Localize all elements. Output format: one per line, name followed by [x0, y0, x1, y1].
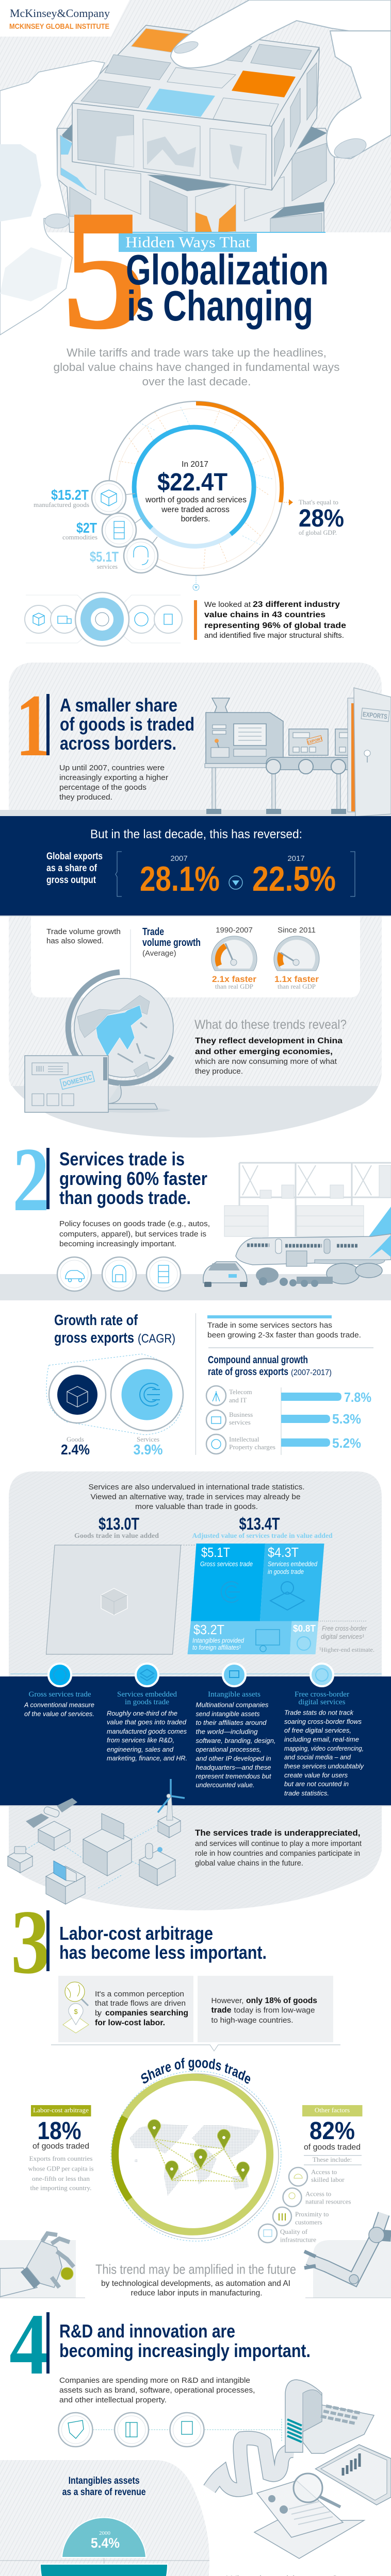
manufactured goods: manufactured goods: [34, 501, 89, 509]
body: section 4: and other intellectual property.: [59, 2396, 167, 2404]
goods circle: [49, 1366, 106, 1458]
heading 1: across borders.: [60, 733, 176, 754]
text: what do these trends reveal: and other emerging economies,: [195, 1047, 333, 1056]
heading: growth rate: Growth rate of: [54, 1312, 138, 1329]
chart: growth rate of gross exports: [46, 1312, 183, 1458]
body: section 2: becoming increasingly important.: [59, 1240, 176, 1248]
chart: sector CAGR bars: [206, 1315, 373, 1455]
2007 figure: 28.1%: [140, 859, 220, 899]
heading: trade volume growth: [142, 926, 201, 958]
section 3 heading: Labor-cost arbitrage: [59, 1923, 213, 1944]
text: what do these trends reveal: they produce.: [195, 1067, 243, 1076]
body: section 4: Companies are spending more on R&D and intangible: [59, 2376, 250, 2385]
location pins: [148, 2120, 250, 2181]
factor: skilled labor: skilled labor: [311, 2176, 345, 2183]
callout: only 18%: [198, 1976, 333, 2042]
half circle 2000: 5.4%: [91, 2535, 120, 2551]
intro callout: 23 different industry: [253, 600, 340, 609]
column: services embedded: Roughly one-third of the: [107, 1709, 177, 1717]
text: services underappreciated: The services trade is underappreciated,: [195, 1828, 360, 1838]
segment: intangibles: $3.2T: [193, 1622, 224, 1637]
body 1: percentage of the goods: [59, 783, 146, 792]
section 4 heading: becoming increasingly important.: [59, 2340, 311, 2361]
services block: digital services¹: [321, 1633, 365, 1640]
heading 1: [60, 694, 194, 754]
section 2 heading: growing 60% faster: [59, 1168, 207, 1189]
cube: truck: [46, 1861, 85, 1904]
section 4 heading: [9, 2296, 311, 2393]
heading: growth rate: [54, 1312, 175, 1346]
section 2 heading: than goods trade.: [59, 1187, 191, 1208]
callout: only 18%: today is from low-wage: [234, 2006, 315, 2014]
section 4 heading: 4: [9, 2296, 48, 2393]
stat: other factors 82%: of goods traded: [304, 2143, 361, 2152]
segment: services embedded: Services embedded: [268, 1560, 318, 1568]
label: global exports: as a share of: [46, 863, 97, 874]
factory machine and conveyor: [205, 698, 355, 814]
segment: gross services trade: [200, 1545, 253, 1602]
title headline: is Changing: [127, 282, 313, 330]
callout: only 18%: to high-wage countries.: [211, 2016, 293, 2025]
title headline: [126, 246, 329, 330]
chart: share of goods trade ring: [110, 2058, 291, 2241]
text: what do these trends reveal: What do these trends reveal?: [194, 1018, 347, 1032]
column: services embedded: engineering, sales and: [107, 1745, 174, 1753]
column: free digital services: of free digital services,: [284, 1726, 351, 1734]
cube: wind turbine: [158, 1779, 185, 1838]
text: services underappreciated: [195, 1828, 362, 1868]
chart: sector CAGR bars: been growing 2-3x faster than goods trade.: [207, 1331, 361, 1340]
stat: other factors 82%: These include:: [313, 2156, 352, 2163]
title numeral 5: 5: [62, 174, 147, 365]
column: gross services trade: A conventional measure: [24, 1701, 94, 1708]
gauge since 2011: than real GDP: [278, 983, 316, 990]
2007 figure: 2007: [170, 854, 188, 863]
column: free digital services: trade statistics.: [284, 1789, 329, 1797]
illustration: payment terminal and receipt: [209, 2380, 374, 2490]
stat: labor-cost arbitrage 18%: the importing country.: [30, 2184, 92, 2192]
stat: labor-cost arbitrage 18%: Exports from countries: [29, 2155, 93, 2162]
band: exports share reversal: But in the last decade, this has reversed:: [90, 827, 302, 841]
column: gross services trade: Gross services trade: [29, 1690, 91, 1699]
factor: skilled labor: [289, 2167, 345, 2186]
logo: McKinsey & Company: McKinsey&Company: [10, 7, 110, 20]
export door: [348, 688, 391, 817]
callout: only 18%: trade: [211, 2006, 232, 2014]
column: services embedded: in goods trade: [125, 1698, 169, 1706]
panel: services undervalued: [9, 1471, 382, 1910]
gauge 1990-2007: 2.1x faster: [212, 974, 256, 984]
2017 figure: 2017: [287, 854, 305, 863]
ground strip 2: [0, 1274, 391, 1300]
intro callout: value chains in 43 countries: [204, 611, 325, 619]
panel: trade volume growth: has also slowed.: [46, 937, 104, 945]
car: [203, 1262, 247, 1287]
text: services underappreciated: role in how countries and companies participate in: [195, 1849, 360, 1858]
column: intangible assets: to their affiliates around: [196, 1719, 267, 1726]
heading: compound annual growth: rate of gross exports: [208, 1366, 288, 1378]
column: intangible assets: Multinational companies: [196, 1701, 269, 1708]
callout: common perception: It's a common perception: [95, 1990, 184, 1998]
gauge since 2011: [274, 926, 319, 990]
bar: telecom and IT: and IT: [229, 1396, 247, 1404]
gauge since 2011: 1.1x faster: [274, 974, 319, 984]
centre figure: [145, 460, 247, 523]
section 3 heading: has become less important.: [59, 1942, 267, 1963]
text: what do these trends reveal: They reflect development in China: [195, 1037, 343, 1045]
factor: proximity: customers: [295, 2218, 322, 2226]
panel: trade volume growth: [0, 916, 391, 997]
panel: intangibles share of revenue: [0, 2460, 209, 2576]
factor: infrastructure: Quality of: [280, 2228, 308, 2235]
robotic arm right: [304, 2214, 391, 2298]
text: what do these trends reveal: [194, 1018, 347, 1076]
top cube layer: [72, 25, 319, 190]
callout: common perception: that trade flows are driven: [95, 1999, 186, 2008]
cube: documents: [139, 1843, 175, 1886]
factor: proximity: [273, 2207, 329, 2226]
callout: common perception: [58, 1976, 193, 2042]
ground strip: [0, 810, 391, 816]
heading: growth rate: (CAGR): [138, 1332, 175, 1346]
column: free digital services: digital services: [298, 1698, 346, 1706]
callout: only 18%: only 18% of goods: [246, 1996, 317, 2005]
services circle: 3.9%: [133, 1442, 163, 1458]
icon: down arrow: [229, 876, 242, 889]
section 3 heading: 3: [11, 1891, 50, 1993]
intro callout: and identified five major structural shifts.: [204, 631, 344, 640]
intro callout: We looked at: [204, 600, 251, 609]
numeral 1: 1: [15, 676, 51, 775]
logo: McKinsey & Company: MCKINSEY GLOBAL INSTITUTE: [9, 22, 109, 31]
heading: compound annual growth: [208, 1354, 332, 1378]
body: section 2: computers, apparel), but services trade is: [59, 1230, 206, 1239]
body: section 2: [59, 1219, 210, 1248]
segment: gross services trade: Gross services trade: [200, 1560, 253, 1568]
half circle 2017: [40, 2564, 168, 2576]
column: services embedded: marketing, finance, and HR.: [107, 1754, 187, 1762]
title: [62, 174, 329, 365]
centre figure: were traded across: [161, 505, 230, 514]
section 4 heading: R&D and innovation are: [59, 2320, 235, 2342]
services block: $13.4T: [239, 1514, 280, 1533]
lower cube layers: [57, 121, 334, 232]
commodities: commodities: [62, 534, 97, 541]
body 1: Up until 2007, countries were: [59, 764, 165, 772]
factor: natural resources: [283, 2188, 351, 2207]
column: free digital services: Free cross-border: [295, 1690, 349, 1699]
2017 figure: 22.5%: [252, 859, 336, 899]
heading 1: A smaller share: [60, 694, 177, 716]
panel: shift 1: [0, 663, 391, 1138]
heading: growth rate: gross exports: [54, 1330, 134, 1346]
factor: natural resources: natural resources: [305, 2198, 351, 2205]
text: services underappreciated: and services will continue to play a more important: [195, 1839, 362, 1848]
column: free digital services: these services undoubtably: [284, 1762, 364, 1770]
ring: other factors 82%: [125, 2077, 270, 2232]
text: what do these trends reveal: which are now consuming more of what: [194, 1057, 337, 1066]
callout: common perception: for low-cost labor.: [95, 2019, 165, 2027]
stat: labor-cost arbitrage 18%: 18%: [37, 2117, 82, 2145]
segment: intangibles: Intangibles provided: [192, 1636, 245, 1645]
column: services embedded: Services embedded: [117, 1690, 177, 1699]
services: [90, 537, 158, 573]
text: trend amplified: [0, 2262, 391, 2298]
bar: intellectual property charges: Property charges: [229, 1443, 275, 1451]
value chain icons row: [25, 592, 182, 646]
label: global exports: Global exports: [46, 851, 103, 862]
stat: other factors 82%: 82%: [309, 2117, 355, 2145]
section 2 heading: 2: [12, 1128, 50, 1230]
goods block: [46, 1514, 181, 1654]
right hand fingers: [171, 0, 391, 162]
icon: location dollar: $: [74, 2008, 78, 2015]
services: services: [97, 563, 118, 570]
warehouse shelves: [224, 1163, 391, 1236]
column: free digital services: but are not counted in: [284, 1780, 349, 1788]
column: intangible assets: software, branding, design,: [196, 1737, 275, 1744]
stat: labor-cost arbitrage 18%: of goods traded: [32, 2142, 89, 2151]
half circle 2000: 2000: [99, 2530, 110, 2536]
column: intangible assets: undercounted value.: [196, 1781, 255, 1789]
trade value ring chart: [34, 401, 344, 590]
intro text: global value chains have changed in fundamental ways: [54, 361, 339, 374]
segment: free digital: $0.8T: [293, 1623, 316, 1634]
stat: other factors 82%: [258, 2105, 362, 2243]
intro text: [54, 346, 339, 388]
illustration: reports and magnifier: [254, 2445, 391, 2558]
column: intangible assets: headquarters—and these: [196, 1764, 271, 1771]
column: free digital services: [284, 1664, 364, 1797]
services circle: [111, 1359, 183, 1458]
column: services embedded: [107, 1664, 187, 1762]
segment: intangibles: to foreign affiliates¹: [192, 1643, 241, 1651]
title headline: Globalization: [126, 246, 329, 294]
icon: location dollar: [63, 2004, 89, 2033]
gauge since 2011: Since 2011: [278, 926, 316, 935]
intro callout: [194, 600, 346, 640]
chart: sector CAGR bars: Trade in some services sectors has: [207, 1321, 332, 1330]
column: intangible assets: send intangible assets: [196, 1710, 260, 1718]
column: free digital services: and social media – and: [284, 1753, 351, 1761]
factor: skilled labor: Access to: [311, 2168, 337, 2176]
segment: services embedded: [268, 1545, 318, 1610]
stat: other factors 82%: Other factors: [315, 2106, 350, 2114]
bar: intellectual property charges: Intellectual: [229, 1435, 259, 1443]
icon: globe and magnifier: [65, 1982, 88, 2006]
globe and domestic box: [25, 972, 173, 1113]
bar: intellectual property charges: 5.2%: [332, 1435, 361, 1451]
box: domestic: [25, 1056, 108, 1112]
body 1: they produced.: [59, 793, 112, 802]
column: intangible assets: [196, 1664, 275, 1789]
orange arc 28% of GDP: [196, 403, 282, 502]
centre figure: $22.4T: [157, 469, 227, 496]
bar: business services: services: [229, 1418, 251, 1426]
section 2 heading: [12, 1128, 207, 1230]
services circle: Services: [137, 1435, 159, 1443]
icon: down arrow dot: [193, 584, 199, 590]
band: services definitions: [0, 1664, 391, 1806]
column: gross services trade: [24, 1664, 94, 1718]
half circle 2000: [62, 2517, 146, 2557]
column: free digital services: create value for users: [284, 1771, 348, 1779]
column: services embedded: manufactured goods comes: [107, 1727, 187, 1735]
stat: labor-cost arbitrage 18%: one-fifth or less than: [32, 2175, 90, 2182]
centre figure: In 2017: [182, 460, 208, 469]
arrow to GDP share: [282, 499, 293, 505]
services block: Adjusted value of services trade in value added: [192, 1532, 333, 1540]
ring: labor-cost arbitrage 18%: [115, 2117, 129, 2199]
cube: briefcase: [83, 1814, 132, 1876]
label: global exports: [46, 851, 103, 886]
heading: compound annual growth: (2007-2017): [291, 1368, 332, 1377]
stat: labor-cost arbitrage 18%: whose GDP per capita is: [28, 2165, 94, 2172]
icons: goods examples: [57, 1257, 181, 1291]
cube: satellite: [26, 1798, 77, 1851]
factor: proximity: Proximity to: [295, 2210, 329, 2218]
column: free digital services: mapping, video conferencing,: [284, 1744, 364, 1752]
gauge 1990-2007: 1990-2007: [216, 926, 253, 935]
intro callout: representing 96% of global trade: [204, 621, 346, 630]
text: trend amplified: by technological developments, as automation and AI: [101, 2279, 290, 2288]
band: exports share reversal: [0, 816, 391, 916]
bar: telecom and IT: Telecom: [229, 1388, 252, 1396]
goods block: $13.0T: [99, 1514, 139, 1533]
goods circle: 2.4%: [61, 1442, 90, 1458]
intro text: over the last decade.: [142, 375, 251, 388]
goods block: Goods trade in value added: [74, 1532, 159, 1540]
segment: gross services trade: $5.1T: [201, 1545, 230, 1560]
column: gross services trade: of the value of services.: [24, 1710, 94, 1718]
panel: intangibles share of revenue: Intangibles assets: [69, 2476, 140, 2486]
intro text: While tariffs and trade wars take up the headlines,: [67, 346, 327, 359]
GDP share callout: That's equal to: [299, 499, 338, 506]
panel: services undervalued: more valuable than trade in goods.: [135, 1502, 258, 1511]
hero illustration: hands turning a world-map cube: [0, 0, 391, 335]
column: intangible assets: operational processes,: [196, 1745, 261, 1753]
robotic hand left: [0, 2233, 76, 2298]
bar: intellectual property charges: [206, 1434, 361, 1454]
goods circle: Goods: [67, 1435, 84, 1443]
segment: intangibles: [192, 1622, 280, 1652]
body: section 4: [59, 2376, 255, 2404]
manufactured goods: [34, 481, 135, 515]
stat: labor-cost arbitrage 18%: [28, 2105, 94, 2192]
logo: McKinsey & Company: [9, 7, 110, 31]
callout: common perception: companies searching: [105, 2009, 188, 2018]
column: services embedded: value that goes into traded: [107, 1718, 187, 1726]
gauge 1990-2007: than real GDP: [215, 983, 253, 990]
bar: business services: [206, 1410, 361, 1430]
text: trend amplified: reduce labor inputs in manufacturing.: [131, 2289, 262, 2298]
factor: infrastructure: infrastructure: [280, 2236, 316, 2243]
bar: telecom and IT: 7.8%: [344, 1389, 371, 1405]
stat: labor-cost arbitrage 18%: Labor-cost arbitrage: [33, 2106, 89, 2114]
services block: ¹Higher-end estimate.: [319, 1646, 374, 1653]
segment: free digital: [293, 1623, 316, 1650]
heading 1: of goods is traded: [60, 714, 194, 735]
GDP share callout: [299, 499, 344, 536]
icons: intangibles: [59, 2413, 282, 2447]
trade routes: [154, 2139, 243, 2181]
text: services underappreciated: global value chains in the future.: [195, 1859, 303, 1868]
heading: compound annual growth: Compound annual growth: [208, 1354, 308, 1366]
body: section 2: Policy focuses on goods trade (e.g., autos,: [59, 1219, 210, 1228]
commodities: $2T: [76, 520, 97, 536]
panel: services undervalued: Services are also undervalued in international trade statistics.: [89, 1483, 304, 1492]
callout: only 18%: However,: [211, 1996, 243, 2005]
bar: telecom and IT: [206, 1386, 371, 1405]
label: global exports: gross output: [46, 875, 96, 886]
factor: natural resources: Access to: [305, 2190, 331, 2198]
body: section 4: assets such as brand, software, operational processes,: [59, 2386, 255, 2395]
section 3 heading: [11, 1891, 267, 1993]
panel: trade volume growth: Trade volume growth: [46, 927, 121, 936]
heading: trade volume growth: volume growth: [142, 937, 201, 948]
centre figure: borders.: [181, 515, 210, 523]
column: services embedded: from services like R&D,: [107, 1736, 174, 1744]
segment: services embedded: $4.3T: [268, 1545, 299, 1560]
text: trend amplified: This trend may be amplified in the future: [95, 2262, 296, 2277]
cube: small left: [8, 1846, 32, 1873]
column: intangible assets: Intangible assets: [208, 1690, 260, 1699]
services block: Free cross-border: [322, 1624, 367, 1632]
panel: intangibles share of revenue: as a share of revenue: [62, 2487, 146, 2498]
GDP share callout: 28%: [299, 505, 344, 532]
bar: business services: 5.3%: [332, 1411, 361, 1427]
services block: [188, 1514, 374, 1654]
column: intangible assets: represent tremendous but: [196, 1772, 272, 1780]
callout: common perception: by: [95, 2009, 102, 2018]
dotted world map: [129, 2124, 260, 2196]
column: free digital services: Trade stats do not track: [284, 1709, 354, 1717]
heading: trade volume growth: Trade: [142, 926, 164, 938]
isometric services cubes: [8, 1779, 185, 1904]
factor: infrastructure: [258, 2224, 316, 2243]
column: free digital services: including email, real-time: [284, 1735, 359, 1743]
heading: trade volume growth: (Average): [142, 949, 176, 958]
box: domestic: DOMESTIC: [62, 1073, 93, 1088]
title label box: Hidden Ways That: [125, 234, 251, 251]
gauge 1990-2007: [211, 926, 257, 990]
cargo plane: [236, 1207, 391, 1287]
panel: services undervalued: Viewed an alternative way, trade in services may already be: [91, 1493, 300, 1501]
body 1: increasingly exporting a higher: [59, 773, 168, 782]
centre figure: worth of goods and services: [145, 496, 247, 504]
services: $5.1T: [90, 549, 119, 565]
column: free digital services: soaring cross-border flows: [284, 1718, 362, 1725]
manufactured goods: $15.2T: [51, 487, 89, 503]
stamp: EXPORT: EXPORT: [306, 736, 323, 745]
column: intangible assets: and other IP developed in: [196, 1755, 271, 1762]
GDP share callout: of global GDP.: [299, 529, 337, 536]
commodities: [62, 513, 142, 547]
inner donut: [134, 427, 254, 546]
column: intangible assets: the world—including: [196, 1728, 258, 1735]
bar: business services: Business: [229, 1411, 253, 1418]
left hand fingers: [0, 61, 105, 335]
ring heading: Share of goods trade: [141, 2058, 251, 2083]
section 2 heading: Services trade is: [59, 1148, 185, 1170]
body 1: [59, 764, 168, 802]
segment: services embedded: in goods trade: [268, 1568, 304, 1575]
